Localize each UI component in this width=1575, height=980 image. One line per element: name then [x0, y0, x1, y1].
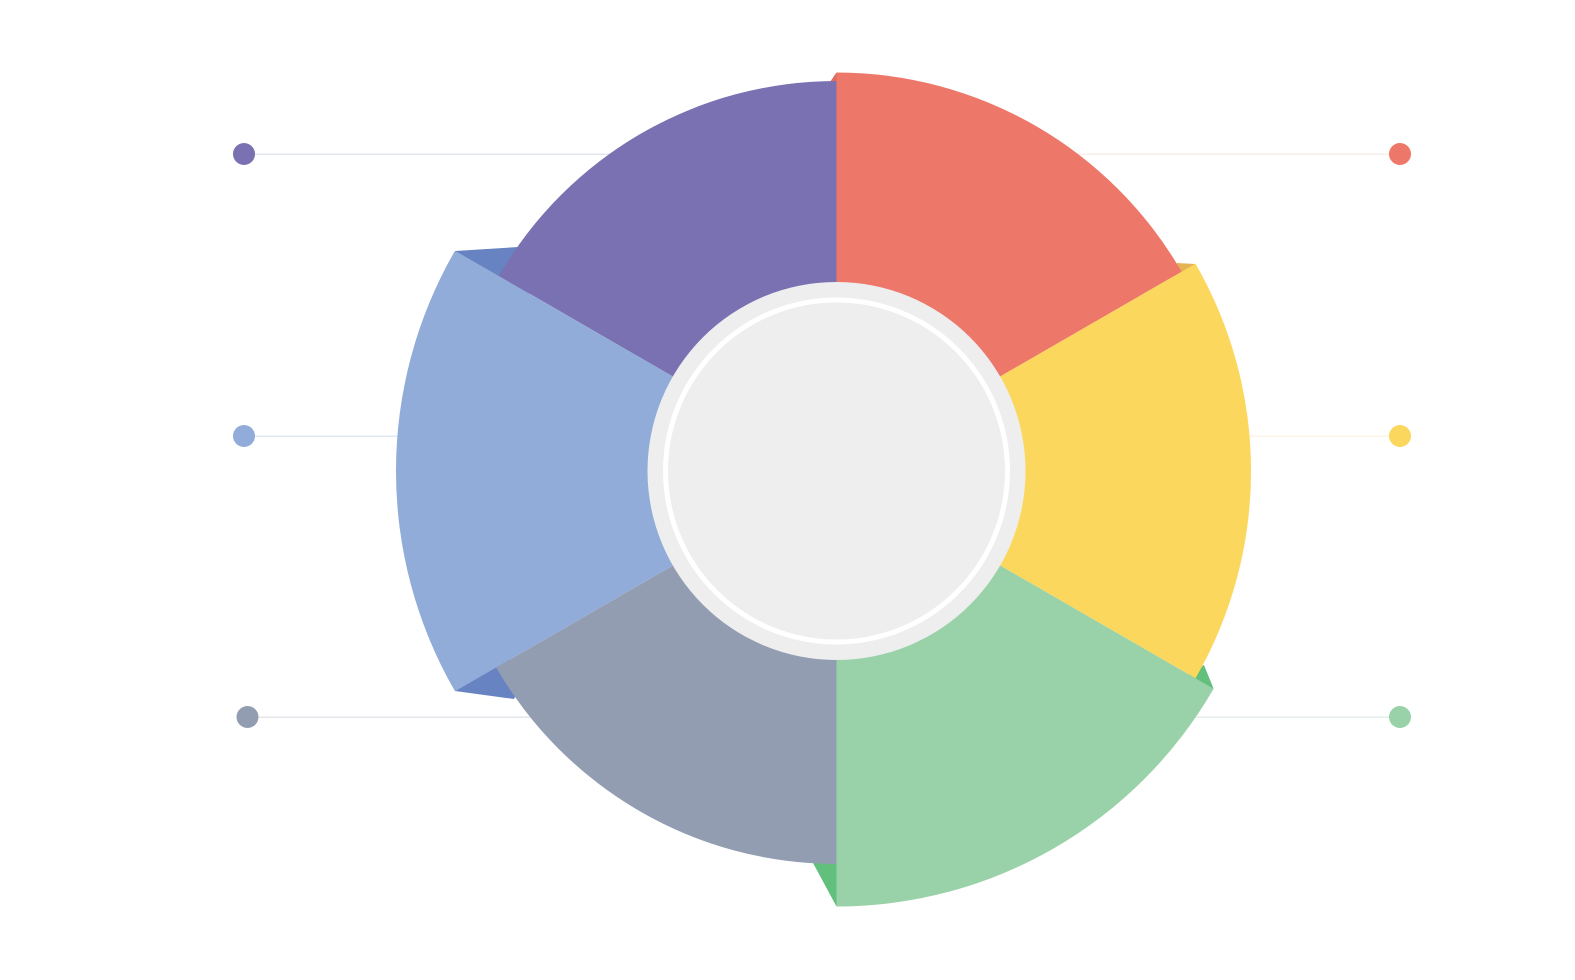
fold: right green shadow [1181, 665, 1214, 689]
segment: grey [496, 471, 836, 864]
segment: yellow [836, 264, 1251, 678]
marker: blue dot [233, 425, 255, 447]
connector: red label line [1050, 154, 1390, 155]
fold: orange shadow [1171, 263, 1195, 285]
segment: purple [499, 81, 836, 471]
marker: red dot [1389, 143, 1411, 165]
fold: bottom blue shadow [455, 660, 531, 699]
center hub [648, 282, 1026, 660]
connector: yellow label line [1200, 436, 1390, 437]
fold: top red shadow [830, 72, 836, 90]
connector: purple label line [255, 154, 655, 155]
marker: grey dot [236, 706, 258, 728]
fold: bottom green shadow [812, 850, 841, 906]
connector: grey label line [258, 716, 558, 718]
segment: blue [396, 251, 836, 691]
marker: purple dot [233, 143, 255, 165]
connector: blue label line [255, 436, 455, 437]
marker: yellow dot [1389, 425, 1411, 447]
wheel [396, 72, 1251, 906]
connector: green label line [1150, 716, 1390, 718]
segment: red [836, 72, 1182, 471]
fold: top blue shadow [455, 247, 531, 300]
segment: green [836, 471, 1214, 906]
hub inner ring [666, 300, 1008, 642]
marker: green dot [1389, 706, 1411, 728]
